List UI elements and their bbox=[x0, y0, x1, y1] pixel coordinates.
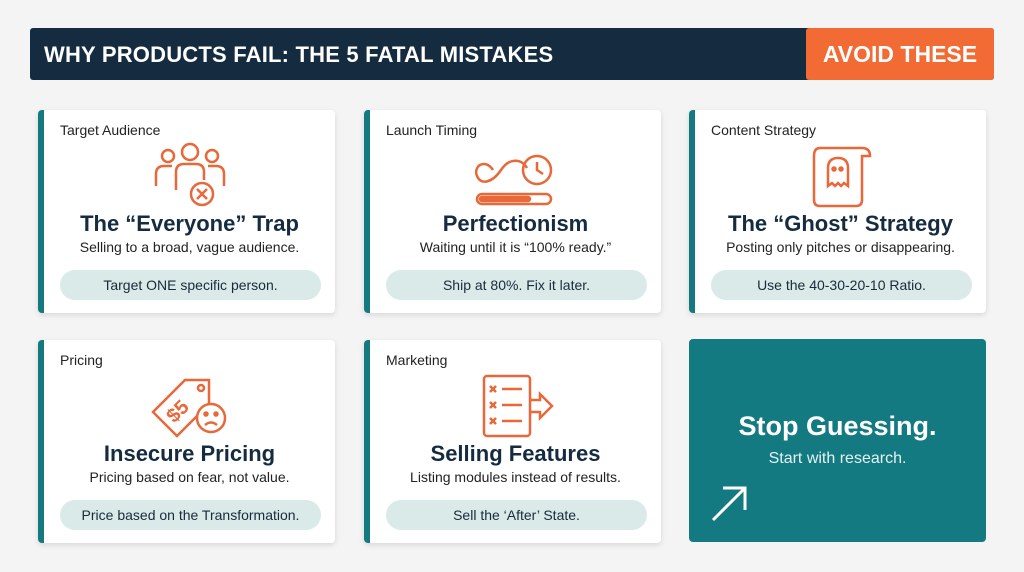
label: Marketing bbox=[386, 352, 447, 368]
pill: fix bbox=[60, 500, 321, 530]
text: Waiting until it is “100% ready.” bbox=[420, 239, 611, 255]
text: Posting only pitches or disappearing. bbox=[726, 239, 955, 255]
text: Pricing based on fear, not value. bbox=[89, 469, 290, 485]
label: Pricing bbox=[60, 352, 103, 368]
pill: fix bbox=[386, 270, 647, 300]
header bar bbox=[30, 28, 994, 80]
panel: launch timing bbox=[364, 110, 661, 313]
heading: Insecure Pricing bbox=[104, 441, 275, 466]
pill: fix: Price based on the Transformation. bbox=[82, 507, 299, 523]
icon: price tag sad: $5 bbox=[162, 396, 193, 427]
title: WHY PRODUCTS FAIL: THE 5 FATAL MISTAKES bbox=[44, 42, 553, 67]
arrow bbox=[712, 486, 746, 521]
text: Start with research. bbox=[769, 450, 906, 467]
pill: fix: Sell the ‘After’ State. bbox=[453, 507, 580, 523]
panel: pricing bbox=[38, 340, 335, 543]
pill: fix bbox=[386, 500, 647, 530]
label: Content Strategy bbox=[711, 122, 816, 138]
text: Selling to a broad, vague audience. bbox=[80, 239, 299, 255]
icon: price tag sad bbox=[151, 378, 226, 438]
panel: marketing bbox=[364, 340, 661, 543]
label: Target Audience bbox=[60, 122, 160, 138]
heading: Selling Features bbox=[431, 441, 600, 466]
pill: fix bbox=[711, 270, 972, 300]
pill: fix: Use the 40-30-20-10 Ratio. bbox=[757, 277, 926, 293]
badge: avoid these bbox=[806, 28, 994, 80]
heading: The “Ghost” Strategy bbox=[728, 211, 953, 236]
text: Listing modules instead of results. bbox=[410, 469, 621, 485]
callout: stop guessing bbox=[689, 339, 986, 542]
heading: The “Everyone” Trap bbox=[80, 211, 299, 236]
icon: ghost scroll bbox=[812, 146, 872, 208]
pill: fix: Target ONE specific person. bbox=[103, 277, 278, 293]
icon: group with x bbox=[154, 142, 226, 206]
panel: target audience bbox=[38, 110, 335, 313]
icon: infinity clock progress bbox=[474, 154, 552, 206]
pill: fix: Ship at 80%. Fix it later. bbox=[443, 277, 590, 293]
pill: fix bbox=[60, 270, 321, 300]
label: Launch Timing bbox=[386, 122, 477, 138]
icon: checklist arrow bbox=[482, 374, 554, 438]
heading: Stop Guessing. bbox=[738, 411, 937, 441]
heading: Perfectionism bbox=[443, 211, 588, 236]
badge: avoid these: AVOID THESE bbox=[823, 41, 977, 67]
panel: content strategy bbox=[689, 110, 986, 313]
